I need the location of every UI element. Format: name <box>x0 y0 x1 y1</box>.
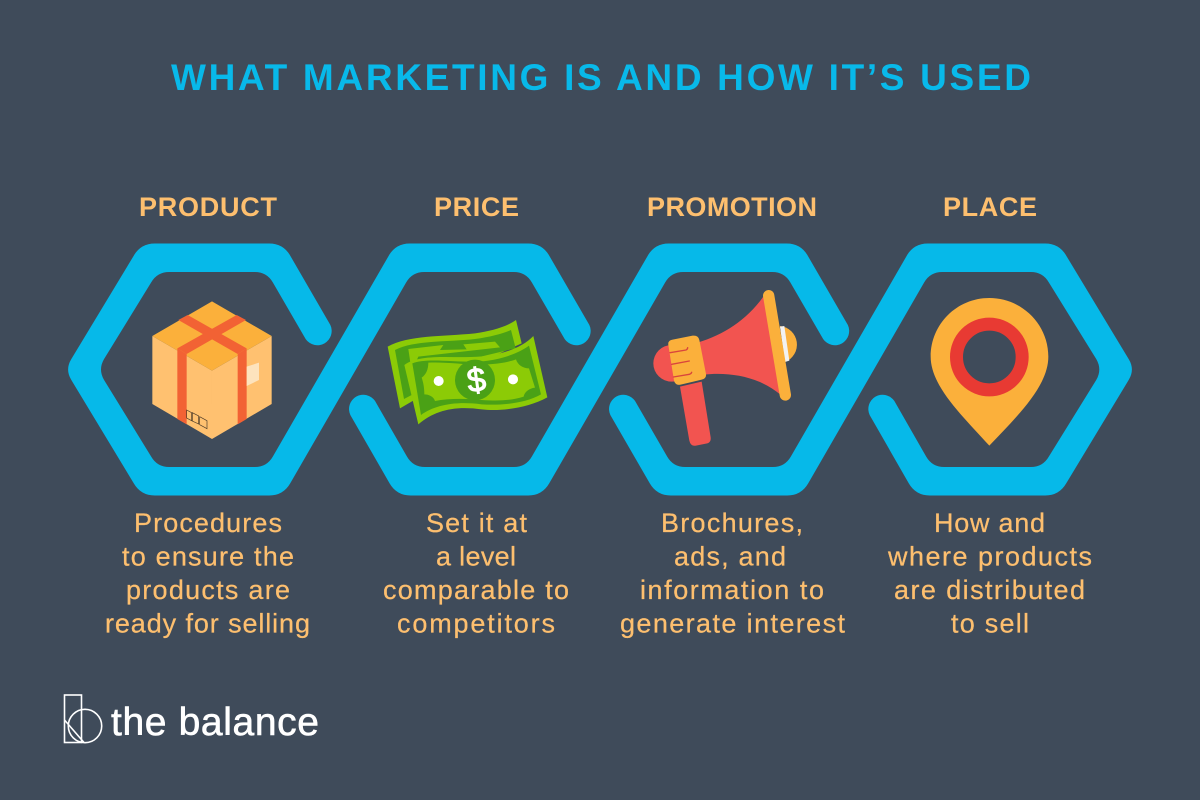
text: price description: Set it at <box>426 508 527 538</box>
text: price description: comparable to <box>383 575 569 605</box>
text: product description: ready for selling <box>105 608 310 638</box>
text: promotion description: generate interest <box>620 608 845 638</box>
text: price description <box>383 508 569 638</box>
icon: dollar bills <box>388 320 547 424</box>
text: price description: competitors <box>397 608 555 638</box>
heading: place: PLACE <box>943 192 1037 222</box>
text: place description: where products <box>887 542 1092 572</box>
text: place description: are distributed <box>894 575 1085 605</box>
text: promotion description: ads, and <box>674 542 786 572</box>
heading: price: PRICE <box>434 192 519 222</box>
icon: dollar bills: $ <box>465 361 488 400</box>
icon: cardboard box <box>152 301 272 439</box>
text: promotion description <box>620 508 845 638</box>
icon: map pin <box>931 298 1048 446</box>
text: place description: How and <box>934 508 1045 538</box>
heading: promotion: PROMOTION <box>647 192 817 222</box>
logo: the balance: the balance <box>111 701 319 744</box>
text: product description <box>105 508 310 638</box>
text: promotion description: Brochures, <box>661 508 803 538</box>
text: price description: a level <box>436 542 516 572</box>
heading: product: PRODUCT <box>139 192 278 222</box>
text: product description: products are <box>126 575 290 605</box>
text: product description: to ensure the <box>122 542 294 572</box>
title: WHAT MARKETING IS AND HOW IT’S USED <box>171 57 1031 98</box>
text: place description <box>887 508 1092 638</box>
text: place description: to sell <box>951 608 1029 638</box>
text: product description: Procedures <box>134 508 282 538</box>
text: promotion description: information to <box>640 575 824 605</box>
hexagon chain <box>68 244 1132 496</box>
icon: megaphone <box>653 296 797 446</box>
